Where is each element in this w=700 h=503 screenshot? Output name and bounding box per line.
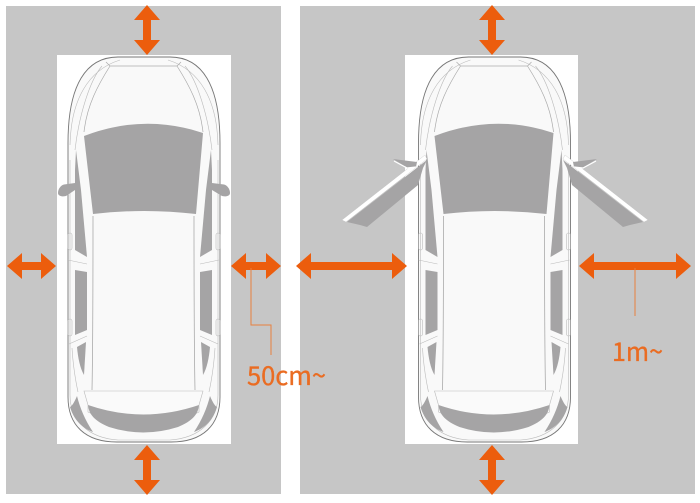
car: doors open [342, 57, 648, 442]
arrow: right car left clearance [296, 253, 407, 279]
car: doors closed [58, 57, 230, 442]
panel: right parking space [300, 6, 695, 494]
arrow: left car bottom clearance [134, 445, 160, 495]
arrow: left car right clearance [231, 253, 281, 279]
label: 50cm: 50cm~ [247, 356, 326, 393]
panel: left parking space [6, 6, 281, 494]
arrow: left car top clearance [134, 5, 160, 55]
arrow: right car top clearance [479, 5, 505, 55]
leader line: 1m [634, 268, 636, 316]
arrow: right car right clearance [579, 253, 691, 279]
left open door [342, 155, 427, 227]
arrow: right car bottom clearance [479, 445, 505, 495]
arrow: left car left clearance [7, 253, 56, 279]
right open door [563, 155, 648, 227]
label: 1m: 1m~ [612, 332, 663, 369]
leader line: 50cm [251, 268, 271, 355]
icon: right mirror [212, 183, 230, 196]
icon: left mirror [58, 183, 75, 196]
